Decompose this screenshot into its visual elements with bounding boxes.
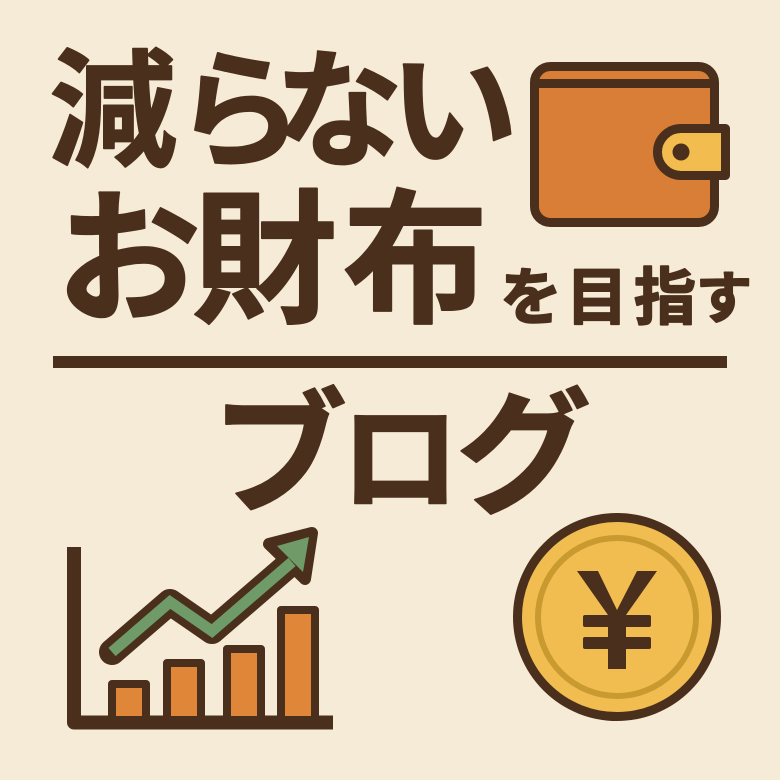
title line 2: お xyxy=(56,179,201,341)
subtitle: を xyxy=(500,264,562,333)
bar 3 xyxy=(227,649,261,720)
heading: blog: ロ xyxy=(340,393,460,527)
title line 2: 布 xyxy=(343,180,488,342)
icon: yen coin xyxy=(518,518,716,716)
heading: blog: ブ xyxy=(212,380,347,531)
divider xyxy=(53,356,727,368)
heading: blog xyxy=(212,380,591,531)
title line 2 xyxy=(56,179,488,342)
title line 1: 減 xyxy=(49,41,177,184)
bar 1 xyxy=(112,684,146,720)
bar 2 xyxy=(167,663,201,720)
heading: blog: グ xyxy=(456,380,591,531)
chart axes xyxy=(74,547,333,722)
title line 1: な xyxy=(275,41,403,184)
bar 4 xyxy=(281,610,315,720)
icon: wallet xyxy=(532,66,726,222)
subtitle xyxy=(500,264,752,333)
title line 1: ら xyxy=(175,41,303,184)
subtitle: 指 xyxy=(634,264,696,333)
trend arrow xyxy=(112,533,312,652)
title line 2: 財 xyxy=(192,180,337,342)
title line 1: い xyxy=(390,41,518,184)
chart: rising bars and arrow xyxy=(74,533,333,722)
subtitle: 目 xyxy=(566,264,628,333)
title line 1 xyxy=(49,41,518,184)
subtitle: す xyxy=(696,267,752,330)
yen symbol xyxy=(577,571,657,669)
